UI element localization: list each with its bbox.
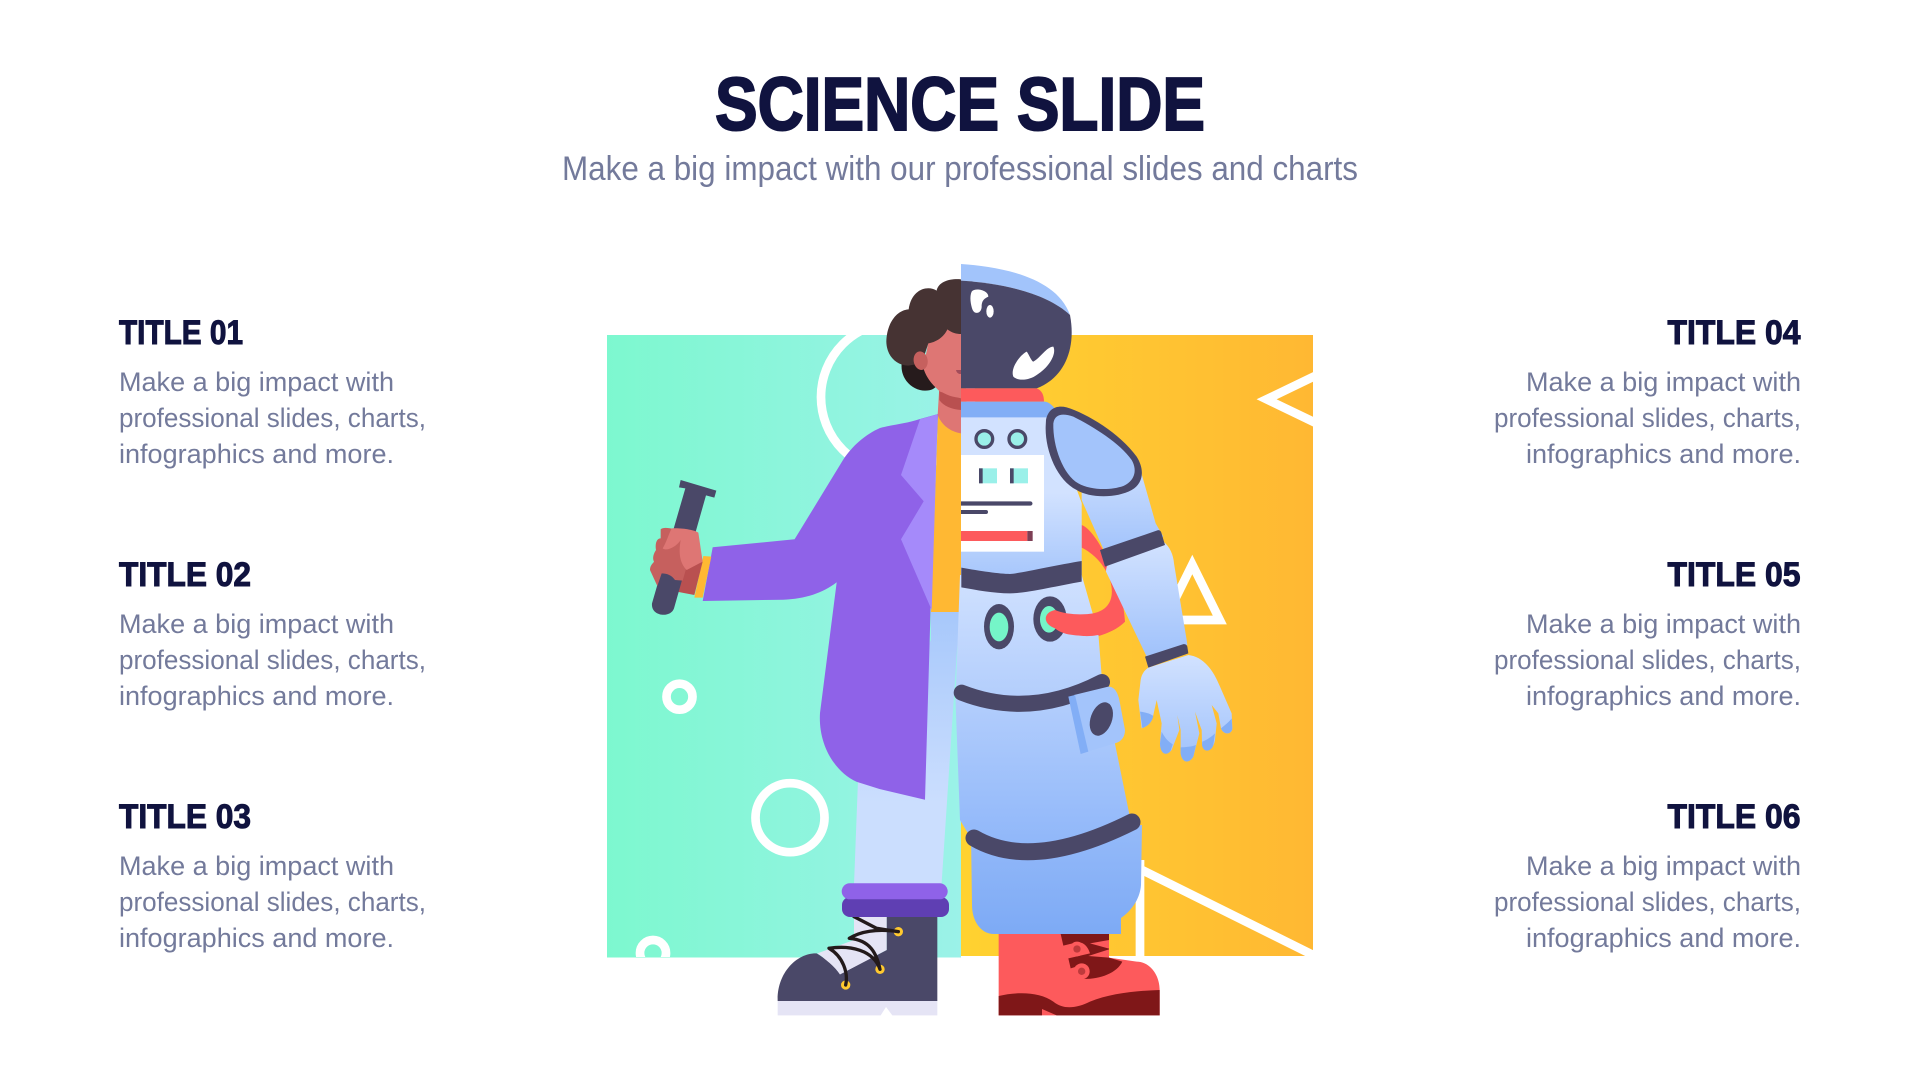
waist belt — [962, 682, 1102, 704]
text block: title 04: Make a big impact with — [1526, 367, 1801, 397]
scientist boot — [778, 917, 937, 1015]
astronaut torso — [961, 417, 1082, 585]
scientist neck and head — [886, 279, 961, 433]
text block: title 02: Make a big impact with — [119, 609, 394, 639]
astronaut glove — [1138, 644, 1232, 761]
text block: title 01: infographics and more. — [119, 439, 394, 469]
panel: green background — [607, 335, 961, 958]
panel: yellow background — [961, 335, 1313, 956]
astronaut tube — [1082, 525, 1125, 640]
astronaut belly and thigh — [956, 575, 1130, 845]
text block: title 02: professional slides, charts, — [119, 645, 426, 675]
background shapes — [640, 322, 1330, 966]
knee belt — [974, 822, 1132, 852]
text block: title 06: professional slides, charts, — [1494, 887, 1801, 917]
text block: title 03: professional slides, charts, — [119, 887, 426, 917]
jacket lapel — [901, 414, 938, 610]
astronaut shoulder pad — [1046, 407, 1142, 496]
text block: title 05: infographics and more. — [1526, 681, 1801, 711]
text block: title 03: infographics and more. — [119, 923, 394, 953]
text block: title 01: professional slides, charts, — [119, 403, 426, 433]
text block: title 05: professional slides, charts, — [1494, 645, 1801, 675]
text block: title 01: Make a big impact with — [119, 367, 394, 397]
scientist trouser leg — [854, 612, 961, 885]
text block: title 04 — [1494, 314, 1801, 469]
text block: title 04: TITLE 04 — [1668, 314, 1801, 352]
astronaut helmet and collar — [961, 264, 1072, 417]
text block: title 02: infographics and more. — [119, 681, 394, 711]
text block: title 03: TITLE 03 — [119, 798, 251, 836]
astronaut forearm and bracer — [1100, 530, 1187, 657]
text block: title 06: infographics and more. — [1526, 923, 1801, 953]
scientist sock — [842, 883, 949, 917]
astronaut lower leg — [971, 825, 1142, 934]
text block: title 02: TITLE 02 — [119, 556, 251, 594]
text block: title 05: Make a big impact with — [1526, 609, 1801, 639]
subtitle: Make a big impact with our professional slides and charts — [562, 150, 1358, 188]
text block: title 01: TITLE 01 — [119, 314, 243, 352]
text block: title 04: professional slides, charts, — [1494, 403, 1801, 433]
scientist hand with test tube — [650, 480, 716, 615]
astronaut pocket — [1068, 687, 1125, 754]
text block: title 06 — [1494, 798, 1801, 953]
text block: title 04: infographics and more. — [1526, 439, 1801, 469]
astronaut belly gauges — [961, 561, 1125, 649]
text block: title 06: Make a big impact with — [1526, 851, 1801, 881]
text block: title 02 — [119, 556, 426, 711]
astronaut boot — [999, 932, 1160, 1015]
scientist shirt — [931, 414, 961, 612]
text block: title 03: Make a big impact with — [119, 851, 394, 881]
text block: title 01 — [119, 314, 426, 469]
text block: title 03 — [119, 798, 426, 953]
astronaut chest panel — [961, 431, 1044, 552]
text block: title 06: TITLE 06 — [1668, 798, 1800, 836]
title: SCIENCE SLIDE — [715, 62, 1205, 146]
scientist jacket — [703, 414, 938, 800]
text block: title 05: TITLE 05 — [1668, 556, 1800, 594]
astronaut upper arm — [1082, 450, 1163, 557]
text block: title 05 — [1494, 556, 1801, 711]
